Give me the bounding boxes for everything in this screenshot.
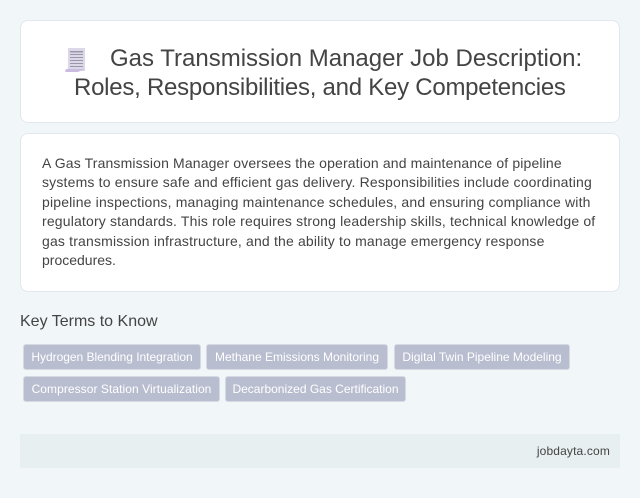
panel: title card (20, 20, 620, 123)
text block: description: regulatory standards. This role requires strong leadership skills, technical knowledge of (42, 213, 595, 229)
panel: description card (20, 133, 620, 292)
text block: description: systems to ensure safe and efficient gas delivery. Responsibilities include coordinating (42, 174, 592, 190)
tag: hydrogen blending (23, 344, 201, 370)
tag: hydrogen blending: Hydrogen Blending Integration (31, 350, 193, 364)
tag: decarbonized gas (225, 376, 406, 402)
footer bar (20, 434, 620, 468)
heading: title line 1: Gas Transmission Manager Job Description: (110, 45, 582, 72)
heading: title line 2: Roles, Responsibilities, and Key Competencies (74, 74, 566, 101)
icon: document scroll (65, 48, 85, 72)
tag: methane emissions (206, 344, 388, 370)
tag: digital twin (394, 344, 570, 370)
text block: description: A Gas Transmission Manager oversees the operation and maintenance of pipeline (42, 155, 562, 171)
tag: decarbonized gas: Decarbonized Gas Certification (232, 382, 399, 396)
tag: digital twin: Digital Twin Pipeline Modeling (402, 350, 562, 364)
text block: description: gas transmission infrastructure, and the ability to manage emergency response (42, 233, 545, 249)
text block: description: procedures. (42, 252, 116, 268)
footer text: jobdayta.com (537, 444, 610, 458)
tag: compressor station: Compressor Station Virtualization (32, 382, 211, 396)
tag: compressor station (23, 376, 220, 402)
text block: description: pipeline inspections, managing maintenance schedules, and ensuring compliance with (42, 194, 591, 210)
tag: methane emissions: Methane Emissions Monitoring (215, 350, 379, 364)
text block: description (42, 155, 596, 268)
heading: key terms: Key Terms to Know (20, 313, 158, 330)
